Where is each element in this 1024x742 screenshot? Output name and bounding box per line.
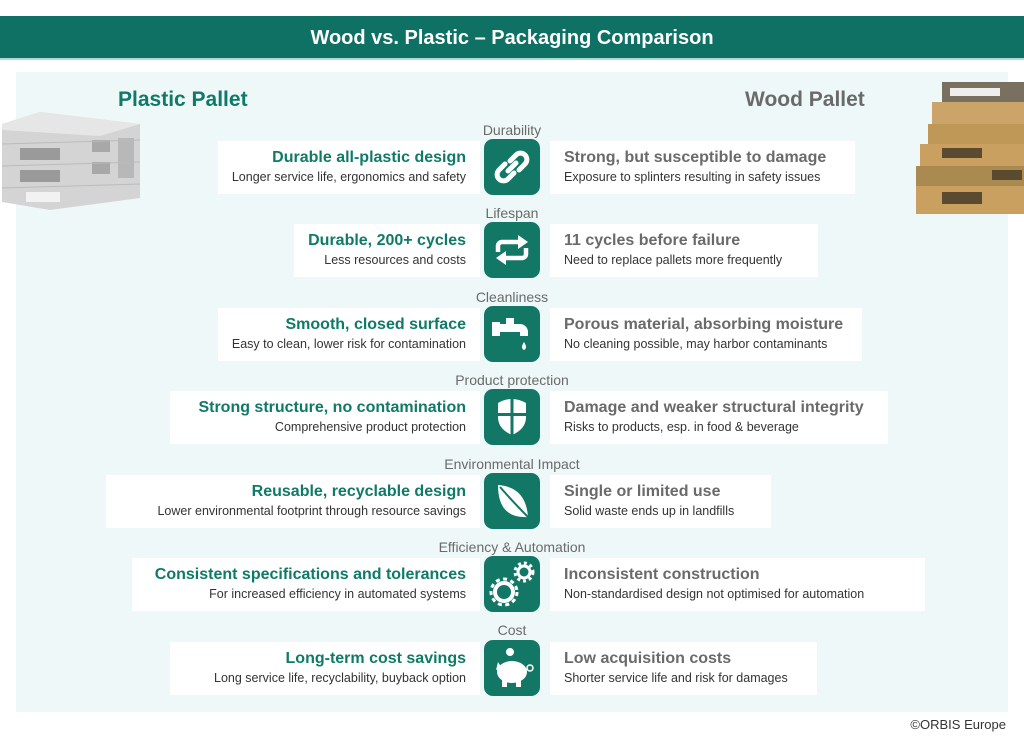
row: environmental impact: [106, 456, 771, 529]
plastic card: Reusable, recyclable design: [252, 483, 466, 500]
wood card: [550, 558, 925, 611]
title bar: [0, 16, 1024, 60]
wood card: Damage and weaker structural integrity: [564, 399, 864, 416]
wood card: [550, 642, 817, 695]
plastic card: Less resources and costs: [324, 253, 466, 267]
wood card: Solid waste ends up in landfills: [564, 504, 734, 518]
wood card: Low acquisition costs: [564, 650, 731, 667]
plastic card: Strong structure, no contamination: [198, 399, 466, 416]
plastic card: [170, 391, 480, 444]
row: product protection: [170, 372, 888, 445]
row: efficiency & automation: [132, 539, 925, 612]
wood card: [550, 475, 771, 528]
category label: Cost: [498, 622, 526, 638]
wood card: Risks to products, esp. in food & beverage: [564, 420, 799, 434]
plastic card: [170, 642, 480, 695]
plastic card: Durable all-plastic design: [272, 149, 466, 166]
category label: Durability: [483, 122, 541, 138]
wood card: [550, 308, 862, 361]
plastic card: [106, 475, 480, 528]
plastic card: Long service life, recyclability, buyback option: [214, 671, 466, 685]
plastic card: Long-term cost savings: [286, 650, 466, 667]
plastic card: Easy to clean, lower risk for contamination: [232, 337, 466, 351]
plastic card: [294, 224, 480, 277]
wood card: Strong, but susceptible to damage: [564, 149, 826, 166]
plastic card: Durable, 200+ cycles: [308, 232, 466, 249]
row: cleanliness: [218, 289, 862, 362]
icon: tap: [484, 306, 540, 362]
category label: Product protection: [455, 372, 569, 388]
category label: Lifespan: [486, 205, 538, 221]
wood card: Shorter service life and risk for damages: [564, 671, 788, 685]
wood card: 11 cycles before failure: [564, 232, 740, 249]
row: cost: [170, 622, 817, 696]
icon: chain link: [484, 139, 540, 195]
wood card: [550, 141, 855, 194]
wood card: Single or limited use: [564, 483, 720, 500]
image: plastic pallet: [2, 112, 140, 210]
wood card: Porous material, absorbing moisture: [564, 316, 843, 333]
plastic card: [218, 141, 480, 194]
plastic card: Longer service life, ergonomics and safety: [232, 170, 466, 184]
icon: gears: [484, 556, 540, 612]
wood card: Exposure to splinters resulting in safety issues: [564, 170, 820, 184]
wood card: Non-standardised design not optimised for automation: [564, 587, 864, 601]
plastic card: Comprehensive product protection: [275, 420, 466, 434]
wood card: Inconsistent construction: [564, 566, 760, 583]
plastic card: [218, 308, 480, 361]
wood card: Need to replace pallets more frequently: [564, 253, 782, 267]
wood card: [550, 391, 888, 444]
category label: Cleanliness: [476, 289, 548, 305]
plastic card: Lower environmental footprint through resource savings: [157, 504, 466, 518]
heading: wood pallet: Wood Pallet: [745, 88, 865, 111]
row: lifespan: [294, 205, 818, 278]
plastic card: Consistent specifications and tolerances: [155, 566, 466, 583]
icon: cycle arrows: [484, 222, 540, 278]
plastic card: Smooth, closed surface: [286, 316, 466, 333]
footer credit: ©ORBIS Europe: [910, 717, 1006, 732]
icon: leaf: [484, 473, 540, 529]
category label: Efficiency & Automation: [439, 539, 585, 555]
plastic card: For increased efficiency in automated systems: [209, 587, 466, 601]
image: wood pallet: [916, 82, 1024, 214]
title bar: Wood vs. Plastic – Packaging Comparison: [310, 27, 714, 49]
icon: piggy bank: [484, 640, 540, 696]
wood card: [550, 224, 818, 277]
wood card: No cleaning possible, may harbor contaminants: [564, 337, 827, 351]
heading: plastic pallet: Plastic Pallet: [118, 88, 248, 111]
icon: shield: [484, 389, 540, 445]
category label: Environmental Impact: [444, 456, 580, 472]
row: durability: [218, 122, 855, 195]
plastic card: [132, 558, 480, 611]
